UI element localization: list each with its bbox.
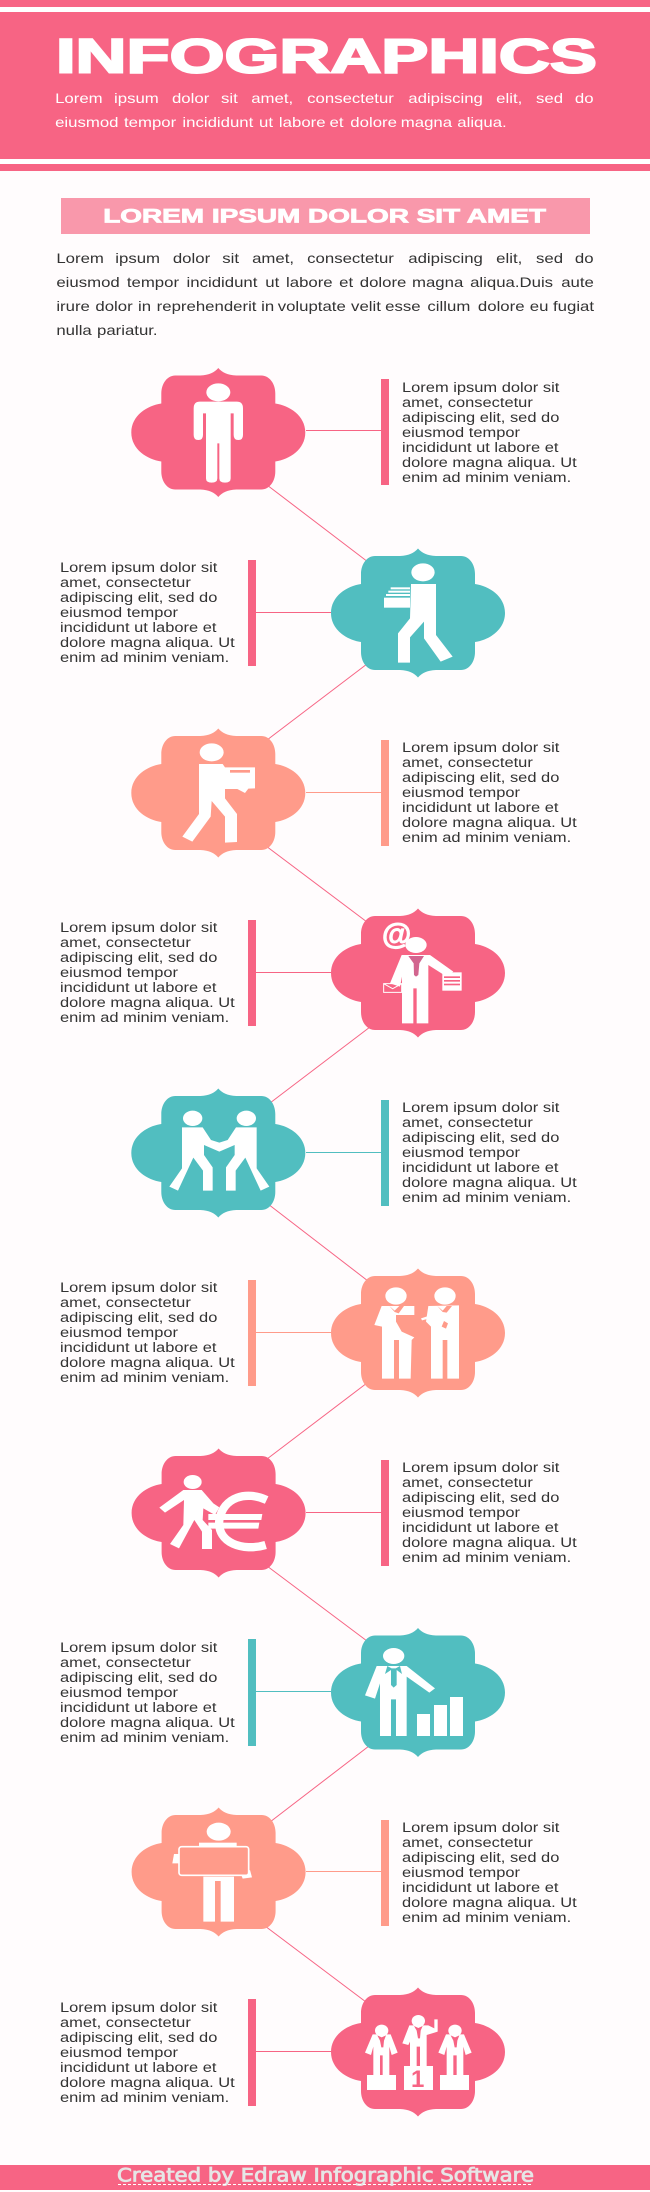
text block: enim ad minim veniam.	[60, 1730, 229, 1746]
text block: adipiscing elit, sed do	[402, 770, 559, 786]
intro paragraph: labore	[286, 275, 333, 291]
badge	[131, 728, 305, 858]
step 3	[131, 728, 578, 858]
intro paragraph: dolor	[95, 299, 133, 315]
intro paragraph: Lorem	[56, 251, 104, 267]
intro paragraph: do	[575, 251, 594, 267]
intro paragraph: pariatur.	[97, 323, 158, 339]
text block: dolore magna aliqua. Ut	[402, 815, 578, 831]
text block: dolore magna aliqua. Ut	[60, 1715, 236, 1731]
step 10	[60, 1988, 505, 2116]
text block: Lorem ipsum dolor sit	[402, 740, 560, 756]
badge	[132, 1808, 306, 1936]
text block: Lorem ipsum dolor sit	[60, 1640, 218, 1656]
intro paragraph: dolore	[478, 299, 525, 315]
intro paragraph: ipsum	[115, 251, 160, 267]
intro paragraph: in	[261, 299, 274, 315]
icon: person carrying box	[182, 743, 255, 843]
footer bar	[0, 2165, 650, 2190]
intro paragraph: nulla	[56, 323, 92, 339]
icon: two businessmen talking	[374, 1287, 459, 1379]
intro paragraph: et	[339, 275, 354, 291]
badge	[131, 368, 305, 497]
text block: enim ad minim veniam.	[402, 830, 571, 846]
icon: two people shaking hands	[169, 1111, 269, 1191]
icon: businessman with bar chart	[365, 1648, 463, 1736]
step 8	[60, 1628, 505, 1757]
text block: eiusmod tempor	[60, 2045, 178, 2061]
subtitle text: dolore	[350, 115, 397, 131]
intro paragraph: esse	[385, 299, 421, 315]
text block: adipiscing elit, sed do	[60, 590, 217, 606]
icon: person pushing euro sign	[159, 1475, 267, 1549]
text block: enim ad minim veniam.	[60, 1370, 229, 1386]
subtitle text: ipsum	[114, 91, 159, 107]
text block: amet, consectetur	[60, 2015, 191, 2031]
subtitle text: magna	[401, 115, 453, 131]
section heading banner: LOREM IPSUM DOLOR SIT AMET	[103, 206, 546, 227]
text block: Lorem ipsum dolor sit	[402, 1460, 560, 1476]
text block: incididunt ut labore et	[60, 1340, 217, 1356]
subtitle text: sit	[221, 91, 239, 107]
step 9	[132, 1808, 578, 1936]
text block: dolore magna aliqua. Ut	[60, 635, 236, 651]
text block: amet, consectetur	[402, 1835, 533, 1851]
subtitle text: do	[575, 91, 594, 107]
icon: person carrying papers	[384, 563, 453, 663]
intro paragraph: elit,	[496, 251, 522, 267]
intro paragraph: amet,	[252, 251, 294, 267]
icon: three people on podium	[365, 2015, 472, 2093]
text block: eiusmod tempor	[402, 425, 520, 441]
title: INFOGRAPHICS	[56, 30, 597, 83]
intro paragraph: ut	[265, 275, 280, 291]
text block: incididunt ut labore et	[402, 1520, 559, 1536]
text block: Lorem ipsum dolor sit	[60, 2000, 218, 2016]
text block: dolore magna aliqua. Ut	[402, 455, 578, 471]
text block: eiusmod tempor	[402, 1505, 520, 1521]
text block: incididunt ut labore et	[402, 1160, 559, 1176]
text block: eiusmod tempor	[60, 605, 178, 621]
text block: amet, consectetur	[402, 1115, 533, 1131]
text block: eiusmod tempor	[402, 1145, 520, 1161]
step 6	[60, 1268, 505, 1398]
subtitle text: adipiscing	[408, 91, 483, 107]
subtitle text: et	[330, 115, 344, 131]
subtitle text: labore	[279, 115, 326, 131]
diagonal connector lines	[265, 485, 370, 2002]
intro paragraph: irure	[56, 299, 90, 315]
text block: amet, consectetur	[402, 755, 533, 771]
intro paragraph: cillum	[427, 299, 470, 315]
badge	[132, 1448, 306, 1578]
text block: amet, consectetur	[60, 1655, 191, 1671]
text block: amet, consectetur	[402, 395, 533, 411]
header band	[0, 0, 650, 171]
section heading banner	[61, 198, 590, 234]
badge	[131, 1088, 305, 1218]
badge	[331, 1988, 505, 2116]
text block: incididunt ut labore et	[402, 440, 559, 456]
intro paragraph: aliqua.Duis	[470, 275, 553, 291]
subtitle text: aliqua.	[457, 115, 507, 131]
intro paragraph: dolore	[360, 275, 406, 291]
text block: adipiscing elit, sed do	[402, 1850, 559, 1866]
intro paragraph: magna	[412, 275, 464, 291]
text block: enim ad minim veniam.	[60, 2090, 229, 2106]
step 5	[131, 1088, 578, 1218]
subtitle text: elit,	[496, 91, 522, 107]
step 4	[60, 908, 505, 1038]
icon: businessman with email and document: @	[382, 918, 411, 951]
icon: businessman with email and document	[382, 918, 462, 1023]
text block: Lorem ipsum dolor sit	[402, 1100, 560, 1116]
subtitle text: amet,	[251, 91, 293, 107]
footer bar: Created by Edraw Infographic Software	[117, 2166, 534, 2186]
intro paragraph: consectetur	[307, 251, 394, 267]
text block: enim ad minim veniam.	[402, 1910, 571, 1926]
intro paragraph: velit	[351, 299, 382, 315]
badge	[331, 908, 505, 1038]
intro paragraph: tempor	[127, 275, 179, 291]
intro paragraph: in	[138, 299, 151, 315]
text block: incididunt ut labore et	[402, 800, 559, 816]
intro paragraph: eu	[530, 299, 548, 315]
subtitle text: Lorem	[55, 91, 103, 107]
text block: amet, consectetur	[60, 575, 191, 591]
intro paragraph: dolor	[173, 251, 210, 267]
intro paragraph: sit	[222, 251, 240, 267]
icon: standing person	[194, 383, 243, 483]
text block: incididunt ut labore et	[402, 1880, 559, 1896]
text block: dolore magna aliqua. Ut	[402, 1895, 578, 1911]
text block: eiusmod tempor	[60, 1685, 178, 1701]
step 1	[131, 368, 578, 497]
text block: adipiscing elit, sed do	[402, 410, 559, 426]
text block: Lorem ipsum dolor sit	[402, 1820, 560, 1836]
text block: adipiscing elit, sed do	[402, 1130, 559, 1146]
subtitle text: sed	[536, 91, 563, 107]
subtitle text: ut	[259, 115, 274, 131]
text block: Lorem ipsum dolor sit	[60, 1280, 218, 1296]
text block: incididunt ut labore et	[60, 980, 217, 996]
icon: person holding sign	[172, 1823, 252, 1922]
intro paragraph: voluptate	[278, 299, 346, 315]
intro paragraph: fugiat	[553, 299, 595, 315]
text block: dolore magna aliqua. Ut	[60, 1355, 236, 1371]
text block: adipiscing elit, sed do	[60, 2030, 217, 2046]
text block: Lorem ipsum dolor sit	[60, 560, 218, 576]
badge	[331, 548, 505, 678]
text block: incididunt ut labore et	[60, 620, 217, 636]
badge	[331, 1628, 505, 1757]
text block: adipiscing elit, sed do	[60, 950, 217, 966]
badge	[331, 1268, 505, 1398]
text block: adipiscing elit, sed do	[60, 1310, 217, 1326]
text block: enim ad minim veniam.	[402, 470, 571, 486]
subtitle text: dolor	[172, 91, 209, 107]
text block: Lorem ipsum dolor sit	[60, 920, 218, 936]
text block: enim ad minim veniam.	[402, 1550, 571, 1566]
text block: dolore magna aliqua. Ut	[402, 1175, 578, 1191]
text block: amet, consectetur	[60, 935, 191, 951]
text block: dolore magna aliqua. Ut	[60, 995, 236, 1011]
subtitle text: eiusmod	[55, 115, 118, 131]
text block: incididunt ut labore et	[60, 2060, 217, 2076]
text block: dolore magna aliqua. Ut	[402, 1535, 578, 1551]
subtitle text: consectetur	[307, 91, 394, 107]
text block: eiusmod tempor	[402, 1865, 520, 1881]
text block: dolore magna aliqua. Ut	[60, 2075, 236, 2091]
text block: enim ad minim veniam.	[60, 1010, 229, 1026]
text block: eiusmod tempor	[60, 965, 178, 981]
intro paragraph: aute	[561, 275, 594, 291]
icon: three people on podium: 1	[411, 2066, 424, 2093]
text block: adipiscing elit, sed do	[60, 1670, 217, 1686]
text block: adipiscing elit, sed do	[402, 1490, 559, 1506]
intro paragraph: incididunt	[187, 275, 258, 291]
intro paragraph: reprehenderit	[157, 299, 257, 315]
subtitle text: incididunt	[182, 115, 254, 131]
text block: eiusmod tempor	[402, 785, 520, 801]
text block: amet, consectetur	[402, 1475, 533, 1491]
intro paragraph: sed	[536, 251, 563, 267]
step 7	[132, 1448, 578, 1578]
subtitle text: tempor	[124, 115, 176, 131]
text block: eiusmod tempor	[60, 1325, 178, 1341]
text block: Lorem ipsum dolor sit	[402, 380, 560, 396]
text block: incididunt ut labore et	[60, 1700, 217, 1716]
text block: amet, consectetur	[60, 1295, 191, 1311]
text block: enim ad minim veniam.	[402, 1190, 571, 1206]
intro paragraph: eiusmod	[56, 275, 120, 291]
text block: enim ad minim veniam.	[60, 650, 229, 666]
step 2	[60, 548, 505, 678]
intro paragraph: adipiscing	[408, 251, 483, 267]
